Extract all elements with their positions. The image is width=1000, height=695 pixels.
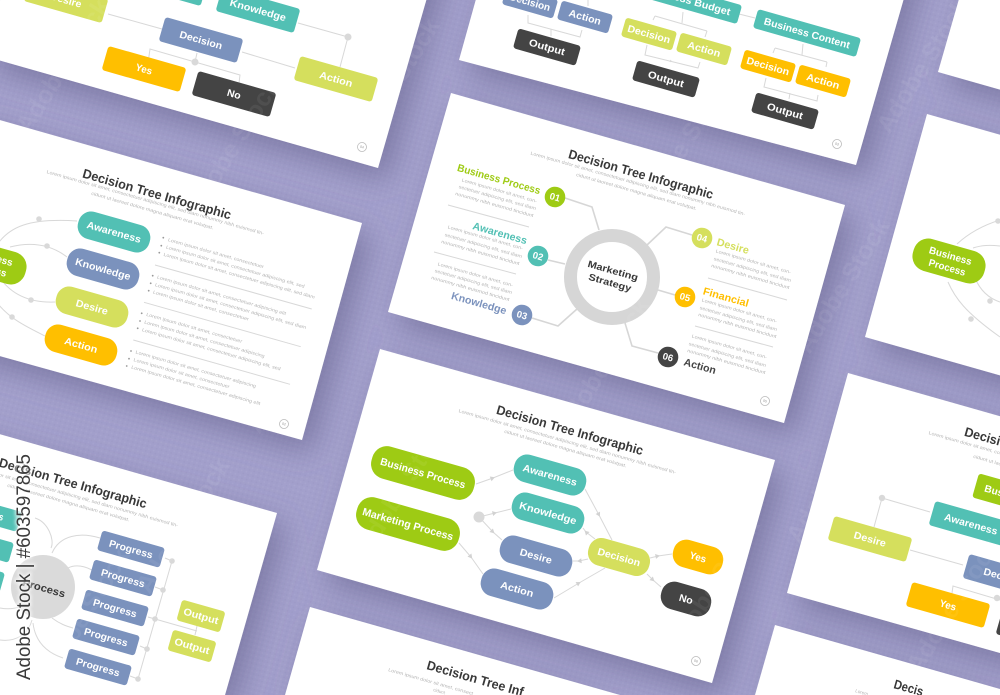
connector lines: [108, 14, 348, 83]
box: Yes: [102, 46, 186, 92]
item 05: [672, 284, 778, 339]
page number: 02: [282, 422, 286, 427]
box: Progress 4: [72, 618, 140, 656]
watermark: repeated Adobe Stock: Adobe Stock: [631, 73, 736, 218]
subtitle: cidunt ut laoreet dolore magna aliquam erat volutpat.: [504, 429, 627, 468]
box: Output 3: [751, 92, 819, 130]
subtitle: Lorem ipsum dolor sit amet, consectetuer adipiscing elit, sed diam nonummy nibh euismod tin-: [46, 169, 265, 236]
box: No: No: [225, 88, 242, 102]
box: Action: Action: [318, 70, 354, 90]
bullet list 4: Lorem ipsum dolor sit amet, consectetuer adipiscing: [135, 350, 257, 389]
pill: Knowledge: [64, 245, 142, 293]
box: Action lime: Action: [686, 40, 722, 60]
pill: Desire: [53, 283, 131, 331]
bullet list 1: [158, 237, 316, 300]
item 01: 01: [548, 191, 562, 205]
subtitle: Lorem ipsum dolor sit amet, consectetuer adipiscing elit, sed diam nonummy nibh euismod tin-: [458, 408, 677, 475]
box: Progress 5: Progress: [75, 657, 121, 680]
bullet list 4: [126, 350, 262, 406]
panel: bottom slide heading, center: [388, 657, 526, 695]
start node: [474, 512, 484, 522]
box: Decision yellow: [740, 49, 796, 83]
pill: Business Process: Business: [928, 245, 973, 268]
pill: Awareness: [511, 451, 589, 499]
watermark: repeated Adobe Stock: Adobe Stock: [351, 413, 456, 558]
curved connectors: [948, 220, 1000, 337]
curved connectors: [0, 518, 100, 658]
box: Desire: Desire: [852, 530, 888, 550]
item 01: sectetuer adipiscing elit, sed diam: [458, 184, 537, 211]
pill: No: No: [677, 593, 694, 607]
pill: No: [658, 579, 714, 619]
bullet list 1: Lorem ipsum dolor sit amet, consectetuer adipiscing elit, sed: [165, 245, 306, 289]
item 04: 04: [695, 232, 709, 246]
bullet list 3: Lorem ipsum dolor sit amet, consectetuer adipiscing elit, sed: [141, 327, 282, 372]
item 03: 03: [515, 309, 528, 323]
item 06: Lorem ipsum dolor sit amet, con-: [691, 333, 768, 360]
box: Progress 2: [89, 559, 157, 597]
item 05: Lorem ipsum dolor sit amet, con-: [701, 297, 778, 324]
box: Output 3: Output: [765, 102, 805, 123]
bullet list 1: Lorem ipsum dolor sit amet, consectetuer: [167, 237, 265, 269]
box: Business Content: Business Content: [762, 16, 852, 52]
box: Desire: [24, 0, 108, 23]
pill: Knowledge: Knowledge: [74, 257, 132, 283]
panel: top-left slide, decision tree with rectangles: [24, 0, 378, 153]
box: Decision lime: [621, 17, 677, 51]
watermark: repeated Adobe Stock: Adobe Stock: [661, 513, 766, 658]
page number: 05: [763, 399, 767, 404]
pill: Marketing Process: [353, 494, 463, 554]
panel: lower-left slide, process to progress tree: [0, 455, 226, 686]
connector lines: [874, 498, 1000, 600]
box: Progress 2: Progress: [100, 568, 146, 591]
item 02: [441, 220, 551, 269]
watermark: repeated Adobe Stock: Adobe Stock: [441, 163, 546, 308]
box: Progress 5: [64, 648, 132, 686]
pill: Awareness: [75, 208, 153, 256]
item 06: [655, 333, 768, 377]
pill: Action: Action: [499, 580, 535, 600]
box: Progress 1: [97, 530, 165, 568]
pill: Action: [478, 565, 556, 613]
subtitle: Lorem ipsum dolor sit amet, consectetuer adipiscing elit, sed diam nonummy nibh euismod tin-: [530, 151, 746, 217]
teal boxes: [0, 494, 22, 593]
Adobe Stock credit, vertical text at left edge: Adobe Stock | #603597865: [14, 454, 35, 680]
item 03: [431, 261, 535, 328]
pill: Action: [42, 321, 120, 369]
watermark: repeated Adobe Stock: Adobe Stock: [241, 293, 346, 438]
pill: Business Process: Business Process: [379, 456, 467, 492]
item 04: Desire: [715, 236, 750, 257]
panel: center-bottom slide, decision flow with pills: [353, 402, 726, 667]
item 04: Lorem ipsum dolor sit amet, con-: [715, 248, 792, 275]
item 06: 06: [661, 351, 674, 365]
subtitle: cidunt ut laoreet dolore magna aliquam erat volutpat.: [91, 191, 214, 230]
box: Awareness: [123, 0, 207, 6]
heading: Decision Tree Infographic: [495, 402, 645, 458]
bullet list 2: Lorem ipsum dolor sit amet, consectetuer adipiscing elit: [156, 275, 287, 316]
item 03: Knowledge: [450, 290, 508, 317]
subtitle: cidunt ut laoreet dolore magna aliquam erat volutpat.: [7, 483, 130, 522]
box: Output 2: [167, 630, 217, 663]
page number: 04: [360, 145, 364, 150]
heading: Decision Tree Infographic: [81, 166, 233, 222]
item 06: Action: [682, 356, 717, 377]
pill: Business Process: [909, 235, 989, 287]
box: Yes: Yes: [134, 62, 154, 78]
bullet list 3: [137, 312, 282, 372]
item 05: 05: [678, 291, 692, 305]
circle: Process: Process: [21, 577, 67, 600]
page number: [690, 655, 702, 667]
item 05: Financial: [702, 285, 750, 310]
box: Decision blue: [502, 0, 558, 19]
hub connector lines: [532, 198, 692, 353]
item 06: nonummy nibh euismod tincidunt: [687, 348, 767, 375]
item 02: Awareness: [471, 220, 529, 247]
pill: Desire: [497, 532, 575, 580]
item 05: nonummy nibh euismod tincidunt: [698, 312, 778, 339]
item 04: [689, 225, 792, 290]
box: Action blue: [557, 0, 613, 34]
heading: Decision Tree Infographic: [567, 146, 715, 202]
bullet list 2: Lorem ipsum dolor sit amet, consectetuer adipiscing elit, sed diam: [154, 282, 307, 330]
item 01: nonummy nibh euismod tincidunt: [455, 191, 535, 218]
bracket lines: [528, 0, 827, 101]
item 01: Lorem ipsum dolor sit amet, con-: [461, 177, 538, 204]
item 04: nonummy nibh euismod tincidunt: [711, 263, 791, 290]
bullet list 3: Lorem ipsum dolor sit amet, consectetuer adipiscing: [144, 320, 266, 359]
item 01: Business Process: [456, 162, 542, 197]
box: Output 2: Output: [173, 637, 211, 657]
page number: [356, 141, 368, 153]
box: No: [192, 71, 276, 117]
watermark: repeated Adobe Stock: Adobe Stock: [551, 293, 656, 438]
connector nodes: [192, 34, 352, 66]
page number: 06: [694, 659, 698, 664]
subtitle: [0, 461, 179, 528]
pill: Desire: Desire: [74, 298, 110, 318]
pill: Decision: Decision: [596, 547, 641, 569]
pill: Business Process: [0, 236, 30, 288]
bullet list 4: Lorem ipsum dolor sit amet, consectetuer: [133, 357, 231, 389]
box: Output 1: [176, 600, 226, 633]
circle: Process: [11, 555, 75, 619]
box: Yes: Yes: [938, 598, 958, 614]
box: Decision lime: Decision: [626, 24, 671, 46]
watermark: repeated Adobe Stock: Adobe Stock: [131, 453, 236, 598]
heading: Decision Tree Infographic: [0, 455, 149, 511]
item 03: Lorem ipsum dolor sit amet, con-: [437, 261, 514, 288]
pill: Decision: [585, 535, 653, 579]
watermark: repeated Adobe Stock: Adobe Stock: [181, 73, 286, 218]
page number: [831, 138, 843, 150]
panel: right slide, business process orbit: [909, 218, 1000, 337]
box: Action: [294, 56, 378, 102]
item 05: sectetuer adipiscing elit, sed diam: [699, 305, 778, 332]
connector nodes: [9, 216, 50, 320]
watermark: repeated Adobe Stock: Adobe Stock: [341, 13, 446, 158]
box: Knowledge: [216, 0, 300, 33]
item 02: 02: [531, 250, 544, 264]
hub ring with Marketing Strategy label: Strategy: [587, 272, 633, 295]
pill: Action: Action: [63, 336, 99, 356]
watermark: repeated Adobe Stock: Adobe Stock: [791, 213, 896, 358]
box: No: [996, 610, 1000, 656]
bullet list 2: Lorem ipsum dolor sit amet, consectetuer: [152, 290, 250, 322]
box: Decision: [159, 17, 243, 63]
box: Action lime: [676, 32, 732, 66]
box: Output 1: [513, 28, 581, 66]
bullet list 3: Lorem ipsum dolor sit amet, consectetuer: [146, 312, 243, 344]
box: Progress 3: [81, 589, 149, 627]
pill: Desire: Desire: [518, 547, 554, 567]
pill: Knowledge: [509, 489, 587, 537]
Adobe Stock credit, vertical text at left edge: Adobe Stock | #603597865: [14, 454, 35, 680]
pill: Yes: Yes: [688, 550, 708, 566]
page number: [759, 395, 771, 407]
box: Output 2: Output: [646, 70, 686, 91]
connector nodes: [968, 218, 1000, 322]
flow arrows: [459, 470, 672, 598]
page number: 03: [835, 142, 839, 147]
item 03: sectetuer adipiscing elit, sed diam: [434, 268, 513, 295]
rail nodes: [135, 558, 175, 682]
panel: top-center slide, budget and output trees: [502, 0, 861, 150]
item 06: sectetuer adipiscing elit, sed diam: [688, 341, 767, 368]
hub ring with Marketing Strategy label: [570, 236, 654, 318]
subtitle: Lorem ipsum dolor sit amet, consect: [388, 667, 475, 695]
watermark: repeated Adobe Stock: Adobe Stock: [781, 403, 886, 548]
box: Output 1: Output: [527, 38, 567, 59]
item 03: nonummy nibh euismod tincidunt: [431, 275, 511, 302]
box: Business Content: [753, 9, 861, 57]
subtitle: cidunt ut laoreet dolore magna aliquam erat volutpat.: [576, 172, 697, 211]
box: Decision yellow: Decision: [745, 56, 790, 78]
pill: Marketing Process: Marketing Process: [361, 506, 455, 543]
hub ring with Marketing Strategy label: Marketing: [586, 259, 639, 284]
box: Progress 1: Progress: [108, 539, 154, 562]
pill: Business Process: [368, 443, 478, 503]
box: Desire: [828, 516, 912, 562]
panel: bottom slide heading, right: [855, 676, 925, 695]
item 02: Lorem ipsum dolor sit amet, con-: [447, 224, 524, 251]
box: Progress 4: Progress: [83, 627, 129, 650]
panel: center slide, marketing strategy hub: [431, 146, 792, 407]
pill: Business Process: Process: [927, 258, 967, 279]
output rail: [130, 558, 197, 679]
bullet list 1: Lorem ipsum dolor sit amet, consectetuer adipiscing elit, sed diam: [163, 252, 316, 300]
pill: Yes: [670, 537, 726, 577]
page number: [278, 418, 290, 430]
box: Decision: [963, 554, 1000, 600]
box: Decision: Decision: [178, 30, 223, 52]
box: Action yellow: Action: [805, 72, 841, 92]
connector nodes: [879, 495, 1000, 601]
pill: Awareness: Awareness: [521, 463, 579, 489]
pill: Knowledge: Knowledge: [518, 501, 578, 527]
item 02: nonummy nibh euismod tincidunt: [441, 239, 521, 266]
box: Action yellow: [795, 64, 851, 98]
bullet list 4: Lorem ipsum dolor sit amet, consectetuer adipiscing elit: [131, 365, 262, 406]
box: Output 2: [632, 60, 700, 98]
box: Business Budget: [634, 0, 742, 24]
item 01: [455, 162, 568, 218]
box: Business Process: [972, 473, 1000, 527]
item 02: sectetuer adipiscing elit, sed diam: [444, 232, 523, 259]
box: Awareness: Awareness: [943, 512, 999, 538]
panel: left slide, bulleted decision list: [0, 166, 316, 430]
box: Action blue: Action: [567, 8, 602, 28]
watermark: repeated Adobe Stock: Adobe Stock: [31, 543, 136, 688]
curved connectors: [0, 220, 77, 336]
bullet list 2: [148, 275, 307, 330]
box: Progress 3: Progress: [92, 598, 138, 621]
panel: lower-right slide, decision tree: [828, 424, 1000, 656]
item 04: sectetuer adipiscing elit, sed diam: [713, 256, 792, 283]
box: Output 1: Output: [182, 607, 220, 627]
box: Awareness: [929, 501, 1000, 547]
box: Yes: [906, 582, 990, 628]
pill: Awareness: Awareness: [85, 220, 143, 246]
